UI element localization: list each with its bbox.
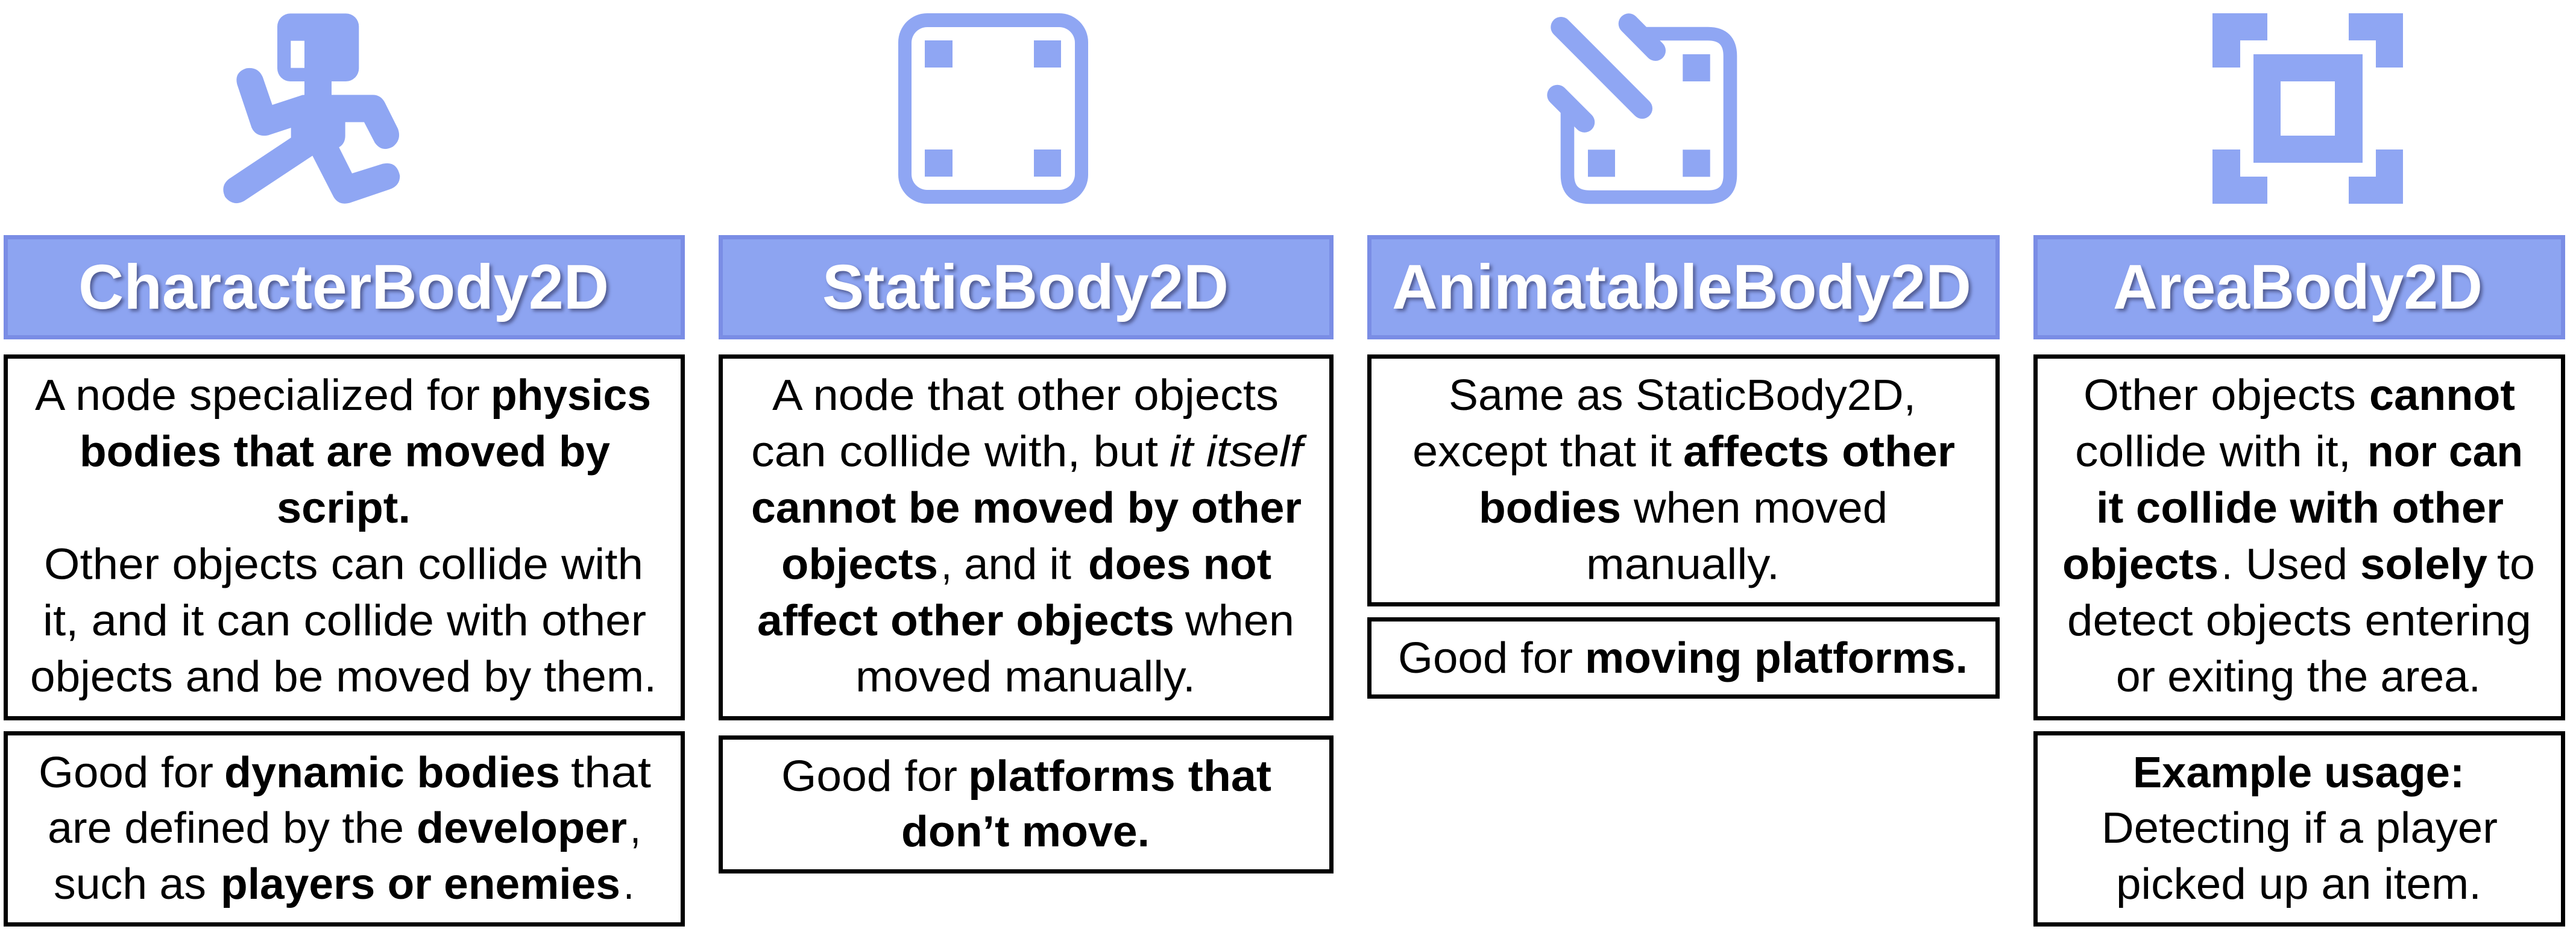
text block: CharacterBody2D description: A node specialized for [35,371,480,420]
text block: AnimatableBody2D description: manually. [1586,540,1780,588]
text block: StaticBody2D description: can collide with, but [751,428,1158,476]
heading: AreaBody2D [2035,238,2563,338]
text block: AnimatableBody2D usage: Good for [1398,634,1573,682]
icon: static block [898,13,1088,204]
text block: AreaBody2D example usage [2035,733,2563,925]
text block: CharacterBody2D description: bodies that are moved by [80,428,610,476]
text block: CharacterBody2D usage: such as [54,860,206,908]
text block: AreaBody2D description: . [2222,540,2232,588]
text block: StaticBody2D description: when [1185,597,1294,645]
text block: AreaBody2D description: detect objects entering [2067,597,2531,645]
text block: StaticBody2D description: A node that other objects [772,371,1279,420]
text block: CharacterBody2D description: objects and be moved by them. [30,653,657,701]
text block: AnimatableBody2D usage: moving platforms. [1585,634,1968,682]
text block: AreaBody2D description: Used [2246,540,2348,588]
text block: CharacterBody2D usage [6,733,682,925]
text block: CharacterBody2D usage: players or enemies [221,860,620,908]
text block: StaticBody2D description: affect other objects [757,597,1174,645]
text block: AreaBody2D description: or exiting the area. [2116,653,2481,701]
text block: CharacterBody2D usage: that [571,749,651,797]
heading: AnimatableBody2D: AnimatableBody2D [1392,252,1971,323]
text block: StaticBody2D description: cannot be moved by other [751,484,1302,532]
text block: StaticBody2D description: it itself [1170,428,1308,476]
text block: StaticBody2D description: objects [781,540,938,588]
text block: AreaBody2D example usage: Example usage: [2133,749,2464,797]
panel: StaticBody2D [721,13,1331,872]
text block: StaticBody2D description: moved manually. [855,653,1195,701]
text block: AreaBody2D description: nor can [2367,428,2523,476]
text block: AnimatableBody2D description [1370,357,1998,604]
heading: CharacterBody2D: CharacterBody2D [78,252,609,323]
text block: AnimatableBody2D description: when moved [1633,484,1888,532]
text block: StaticBody2D description [721,357,1331,719]
text block: StaticBody2D usage: platforms that [968,752,1271,801]
heading: AreaBody2D: AreaBody2D [2113,252,2483,323]
text block: CharacterBody2D description: it, and it can collide with other [43,597,646,645]
heading: CharacterBody2D [6,238,682,338]
text block: CharacterBody2D description: physics [491,371,651,420]
text block: CharacterBody2D description: Other objects can collide with [44,540,643,588]
text block: AreaBody2D description: collide with it, [2075,428,2351,476]
text block: CharacterBody2D usage: . [623,860,634,908]
text block: StaticBody2D usage: Good for [781,752,957,801]
text block: StaticBody2D usage [721,738,1331,872]
text block: StaticBody2D usage: don’t move. [901,808,1150,856]
text block: StaticBody2D description: , [941,540,952,588]
text block: AreaBody2D description [2035,357,2563,719]
text block: AreaBody2D description: objects [2062,540,2219,588]
text block: StaticBody2D description: and it [964,540,1071,588]
text block: AnimatableBody2D description: bodies [1479,484,1621,532]
text block: AreaBody2D description: solely [2360,540,2487,588]
heading: AnimatableBody2D [1370,238,1998,338]
heading: StaticBody2D [721,238,1331,338]
text block: CharacterBody2D description [6,357,682,719]
text block: AreaBody2D example usage: Detecting if a player [2102,804,2498,852]
text block: StaticBody2D description: does not [1088,540,1271,588]
text block: AreaBody2D example usage: picked up an item. [2116,860,2481,908]
text block: AnimatableBody2D description: Same as StaticBody2D, [1449,371,1916,420]
panel: AreaBody2D [2035,13,2563,925]
text block: AreaBody2D description: to [2497,540,2535,588]
text block: AnimatableBody2D description: affects other [1683,428,1955,476]
text block: AreaBody2D description: it collide with other [2096,484,2504,532]
heading: StaticBody2D: StaticBody2D [822,252,1229,323]
text block: CharacterBody2D usage: developer [417,804,627,852]
text block: AnimatableBody2D usage [1370,620,1998,697]
text block: CharacterBody2D usage: Good for [39,749,213,797]
text block: AreaBody2D description: Other objects [2083,371,2356,420]
panel: AnimatableBody2D [1370,24,1998,696]
text block: CharacterBody2D usage: are defined by the [48,804,404,852]
panel: CharacterBody2D [6,13,682,924]
text block: CharacterBody2D usage: , [630,804,641,852]
icon: block with motion lines [1557,24,1730,197]
text block: CharacterBody2D description: script. [277,484,411,532]
text block: AreaBody2D description: cannot [2369,371,2515,420]
text block: AnimatableBody2D description: except that it [1412,428,1672,476]
icon: running character [223,13,400,204]
text block: CharacterBody2D usage: dynamic bodies [224,749,560,797]
icon: area brackets with hollow square [2212,13,2403,204]
